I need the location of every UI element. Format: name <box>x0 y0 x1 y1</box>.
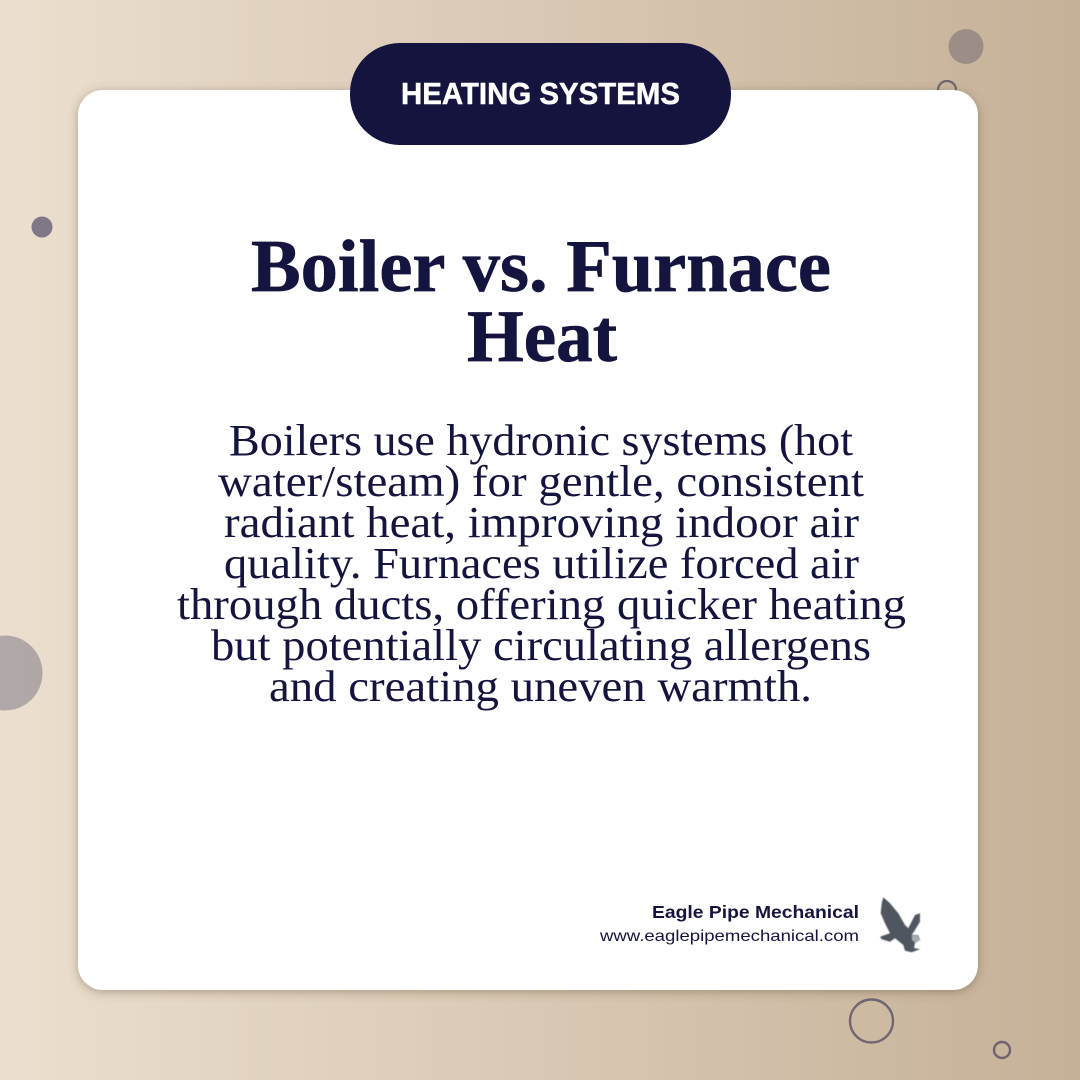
company name and website: www.eaglepipemechanical.com <box>599 928 859 945</box>
company name and website <box>599 902 859 945</box>
body text: and creating uneven warmth. <box>269 662 812 711</box>
body text: radiant heat, improving indoor air <box>224 498 859 547</box>
badge: heating systems <box>350 43 731 145</box>
title: Boiler vs. Furnace <box>251 226 831 308</box>
body text: Boilers use hydronic systems (hot <box>229 416 853 465</box>
company name and website: Eagle Pipe Mechanical <box>652 902 859 922</box>
icon: eagle logo <box>880 897 920 952</box>
title <box>251 226 831 378</box>
body text <box>177 416 906 711</box>
badge: heating systems: HEATING SYSTEMS <box>401 76 680 111</box>
body text: water/steam) for gentle, consistent <box>218 457 864 506</box>
title: Heat <box>467 296 617 378</box>
panel: white card <box>78 90 978 990</box>
body text: through ducts, offering quicker heating <box>177 580 906 629</box>
body text: but potentially circulating allergens <box>211 621 871 670</box>
body text: quality. Furnaces utilize forced air <box>224 539 859 588</box>
